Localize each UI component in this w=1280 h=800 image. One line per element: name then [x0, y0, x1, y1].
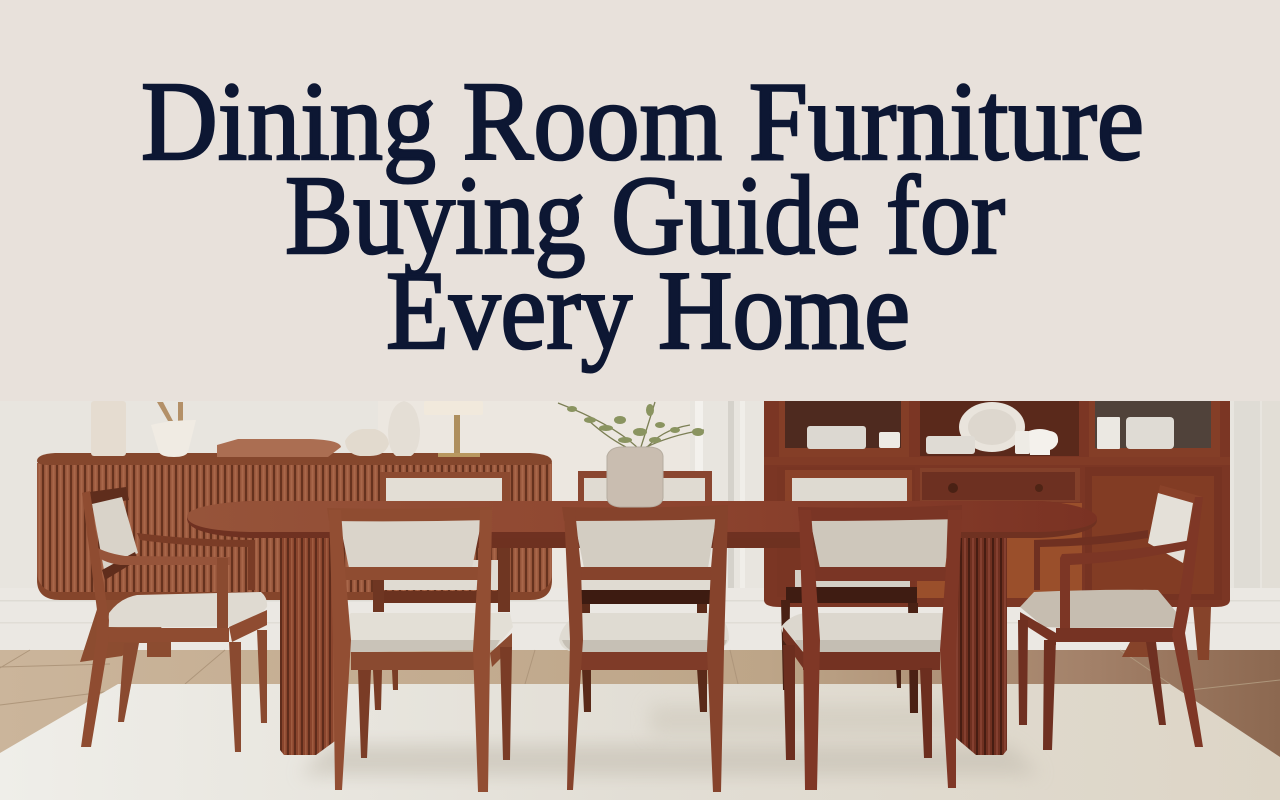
seat rails — [1020, 612, 1177, 645]
seat rails — [108, 610, 267, 642]
vase — [91, 401, 126, 456]
back chair left — [373, 472, 510, 710]
right door — [1085, 467, 1222, 600]
seat — [108, 592, 267, 627]
feet — [1122, 607, 1211, 660]
back — [1158, 485, 1203, 507]
right armchair — [1018, 485, 1203, 750]
legs and post — [81, 491, 109, 747]
sideboard — [37, 453, 552, 662]
title band — [0, 0, 1280, 401]
china cabinet — [764, 401, 1230, 660]
legs and posts — [358, 647, 512, 760]
front chair right — [781, 505, 962, 790]
front chair centre — [559, 505, 729, 792]
near arm — [93, 544, 231, 565]
title: Every Home — [386, 249, 910, 373]
plate stack — [807, 426, 866, 449]
shelf ledge — [764, 457, 1230, 465]
pedestal left — [280, 537, 335, 755]
dining room scene — [0, 401, 1280, 800]
seat rails — [351, 633, 512, 670]
glass door left — [779, 401, 909, 459]
bowl with sticks — [151, 402, 196, 457]
far arm — [1034, 530, 1148, 590]
seat — [335, 613, 513, 652]
decor on sideboard — [91, 401, 483, 457]
tray — [217, 439, 341, 457]
legs and post — [1172, 497, 1203, 747]
back — [82, 487, 129, 506]
lamp — [424, 401, 483, 457]
title — [141, 60, 1144, 373]
wall — [0, 401, 1280, 651]
back chair centre — [578, 471, 712, 712]
floor — [0, 650, 1280, 800]
front chair left — [327, 507, 513, 792]
pedestal right — [956, 537, 1007, 755]
far arm — [137, 533, 255, 590]
small pot — [345, 429, 389, 456]
cross rail — [345, 567, 478, 580]
sideboard feet — [80, 600, 171, 662]
back chair right — [781, 470, 918, 713]
lower left door — [777, 467, 915, 597]
centre lower panel — [917, 503, 1082, 598]
glass door right — [1089, 401, 1220, 459]
table top — [187, 501, 1097, 538]
near arm — [1060, 540, 1192, 628]
apron — [330, 530, 960, 548]
left armchair — [81, 487, 267, 752]
dining table — [187, 501, 1097, 755]
top rail — [327, 507, 492, 521]
title: Dining Room Furniture — [141, 60, 1144, 184]
rug — [0, 684, 1280, 800]
upholstered back — [339, 519, 482, 568]
title: Buying Guide for — [285, 154, 1005, 278]
plant — [558, 402, 704, 450]
open shelf — [920, 401, 1079, 456]
tall vase — [388, 401, 420, 456]
baseboard — [0, 588, 1280, 650]
seat — [1020, 590, 1177, 628]
vase glass — [607, 447, 663, 507]
drawer — [920, 468, 1080, 502]
